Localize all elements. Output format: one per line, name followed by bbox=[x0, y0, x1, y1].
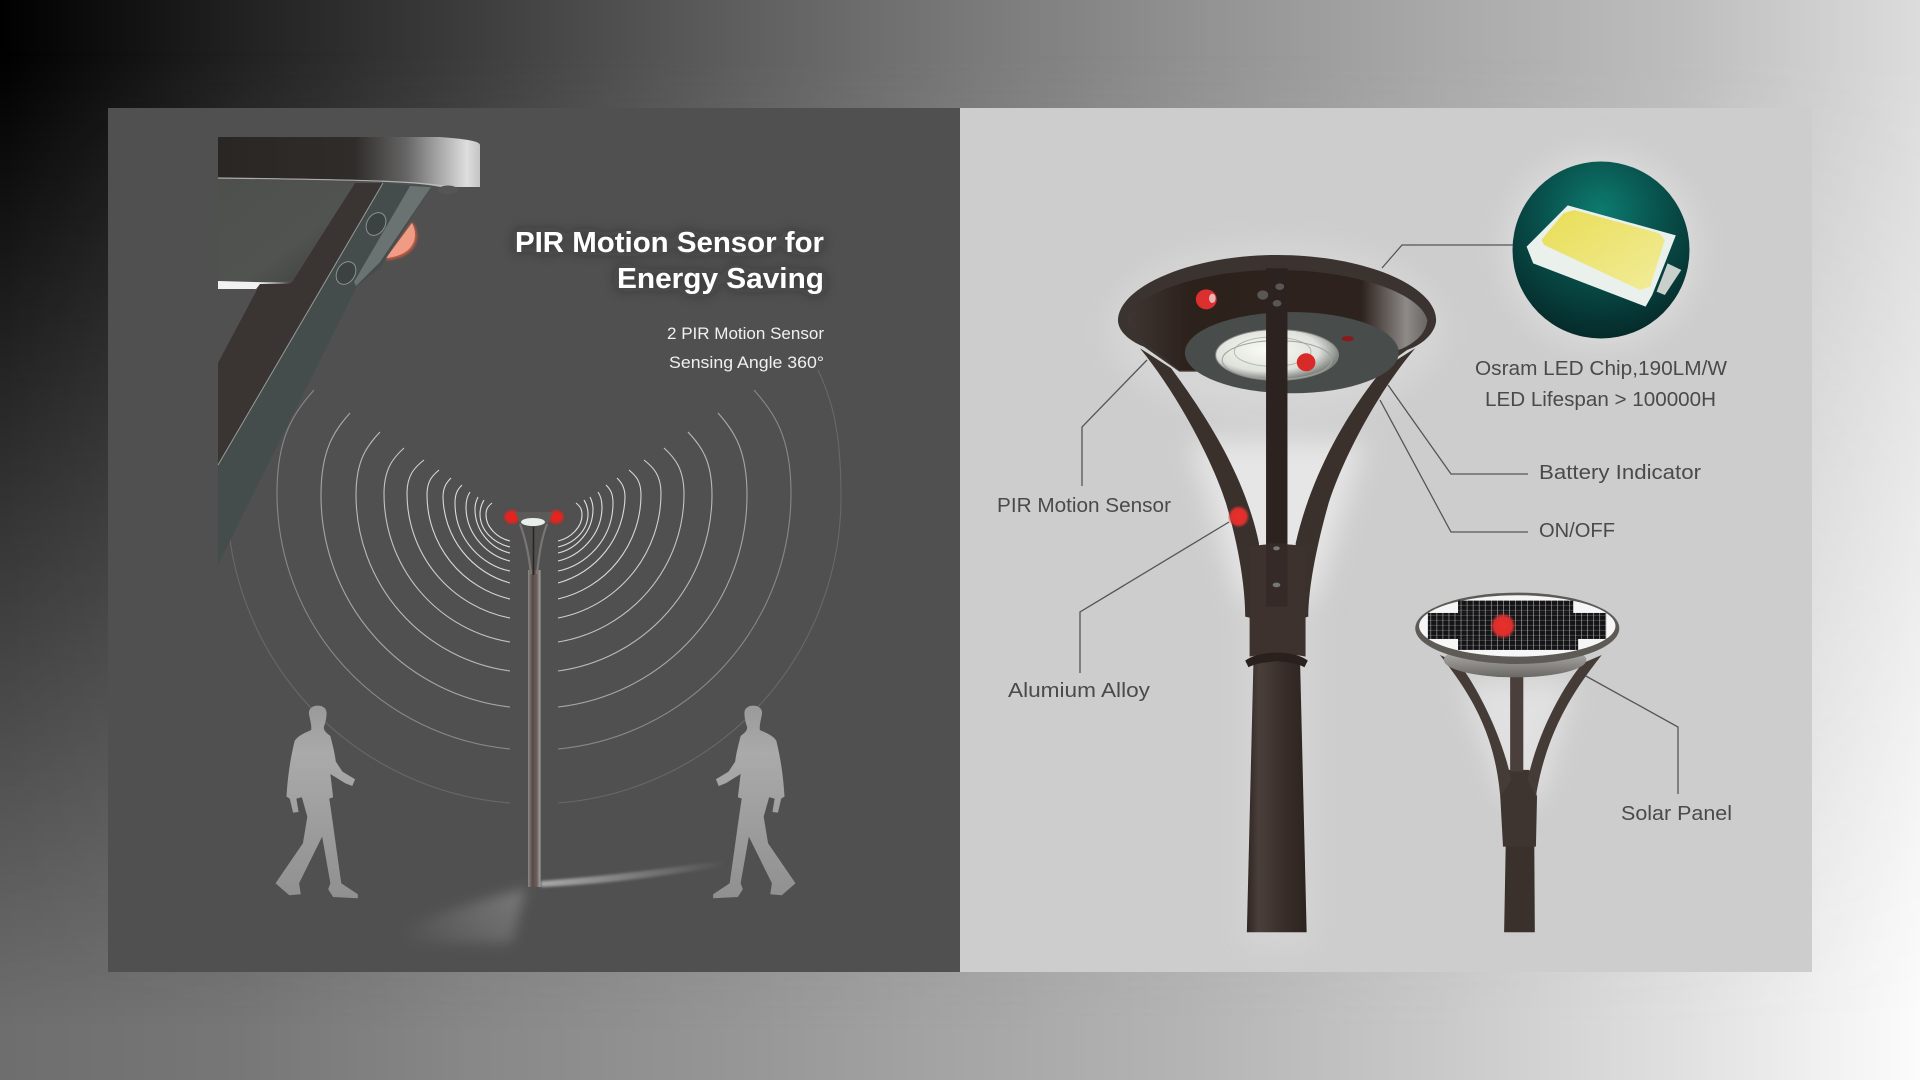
pole bbox=[1504, 843, 1535, 932]
panel: product features (light) bbox=[960, 108, 1812, 972]
centre arm bbox=[1266, 268, 1287, 545]
collar flange bbox=[1245, 653, 1308, 667]
battery indicator dot bbox=[1342, 336, 1354, 341]
arm screws bbox=[332, 209, 390, 288]
panel: PIR motion sensor (dark) bbox=[108, 108, 960, 972]
sensing wave arcs bbox=[227, 370, 841, 803]
label: battery indicator: Battery Indicator bbox=[1539, 461, 1701, 484]
chip body bbox=[1527, 205, 1676, 307]
housing inner cone bbox=[1127, 270, 1427, 370]
small lamp with solar panel bbox=[1415, 593, 1619, 932]
leader lines bbox=[1080, 245, 1678, 794]
labels bbox=[997, 357, 1732, 825]
arm facet bbox=[218, 183, 431, 565]
lamp light bbox=[521, 518, 545, 526]
chip terminal bbox=[1657, 263, 1681, 295]
disc rim bbox=[1415, 593, 1619, 664]
heading: PIR Motion Sensor for Energy Saving: PIR Motion Sensor for bbox=[515, 227, 824, 259]
person walking right side bbox=[713, 706, 795, 898]
chip phosphor bbox=[1541, 210, 1665, 290]
right arm bbox=[1528, 655, 1602, 797]
lamp close-up detail bbox=[218, 137, 480, 565]
soft halos bbox=[1106, 150, 1701, 950]
lower pole bbox=[1247, 662, 1307, 932]
text: sensor specifications: Sensing Angle 360° bbox=[669, 353, 824, 372]
lamp arms bbox=[520, 524, 547, 574]
label: aluminium alloy: Alumium Alloy bbox=[1008, 679, 1151, 702]
red sensor glow right bbox=[548, 510, 564, 524]
right arm bbox=[1296, 348, 1415, 620]
large lamp bbox=[1118, 255, 1436, 932]
pole collar bbox=[1500, 770, 1537, 847]
pir sensor in lens bbox=[1297, 353, 1315, 371]
arm ridge line bbox=[218, 183, 383, 465]
small sensor dot bbox=[438, 186, 458, 194]
lamp disc edge bbox=[218, 137, 480, 187]
centre arm bbox=[1510, 677, 1523, 772]
teal circle bbox=[1512, 162, 1690, 338]
label: solar panel: Solar Panel bbox=[1621, 802, 1732, 825]
collar screws bbox=[1273, 546, 1280, 587]
ground light streaks bbox=[380, 860, 725, 943]
text: sensor specifications bbox=[667, 324, 824, 372]
sensor lens glowing bbox=[385, 222, 417, 260]
red sensor on solar panel bbox=[1490, 613, 1516, 639]
white disc face bbox=[1419, 595, 1615, 657]
dark arm band bbox=[218, 183, 383, 465]
red sensor glow left bbox=[504, 510, 520, 524]
white reflection strip bbox=[218, 281, 292, 289]
label: lifespan: LED Lifespan > 100000H bbox=[1485, 388, 1716, 411]
arm light facet bbox=[354, 186, 431, 286]
lamp head bbox=[515, 512, 553, 524]
screws bbox=[1257, 283, 1284, 307]
label: pir sensor: PIR Motion Sensor bbox=[997, 494, 1171, 517]
lamp housing bbox=[1118, 255, 1436, 372]
LED lens bbox=[1216, 330, 1338, 380]
housing underside bbox=[218, 179, 355, 281]
collar bbox=[1250, 544, 1306, 657]
left arm bbox=[1440, 655, 1511, 797]
label: chip specification: Osram LED Chip,190LM/W bbox=[1475, 357, 1728, 380]
pir sensor reflection bbox=[1209, 294, 1216, 303]
pole bbox=[528, 570, 540, 887]
inner disc bbox=[1185, 312, 1399, 393]
LED chip badge bbox=[1512, 162, 1690, 338]
chip bbox=[1527, 205, 1681, 307]
heading: PIR Motion Sensor for Energy Saving: Energy Saving bbox=[617, 263, 824, 295]
pir sensor top left bbox=[1196, 289, 1217, 309]
centre arm bbox=[532, 527, 534, 575]
left arm bbox=[1140, 348, 1259, 620]
heading: PIR Motion Sensor for Energy Saving bbox=[515, 227, 824, 295]
bowl under disc bbox=[1444, 643, 1586, 677]
solar cell cross bbox=[1428, 601, 1606, 650]
text: sensor specifications: 2 PIR Motion Sensor bbox=[667, 324, 824, 343]
label: on off: ON/OFF bbox=[1539, 519, 1615, 542]
small lamp post bbox=[504, 510, 564, 887]
person walking left side bbox=[276, 706, 358, 898]
arm sensor bbox=[1228, 505, 1250, 528]
